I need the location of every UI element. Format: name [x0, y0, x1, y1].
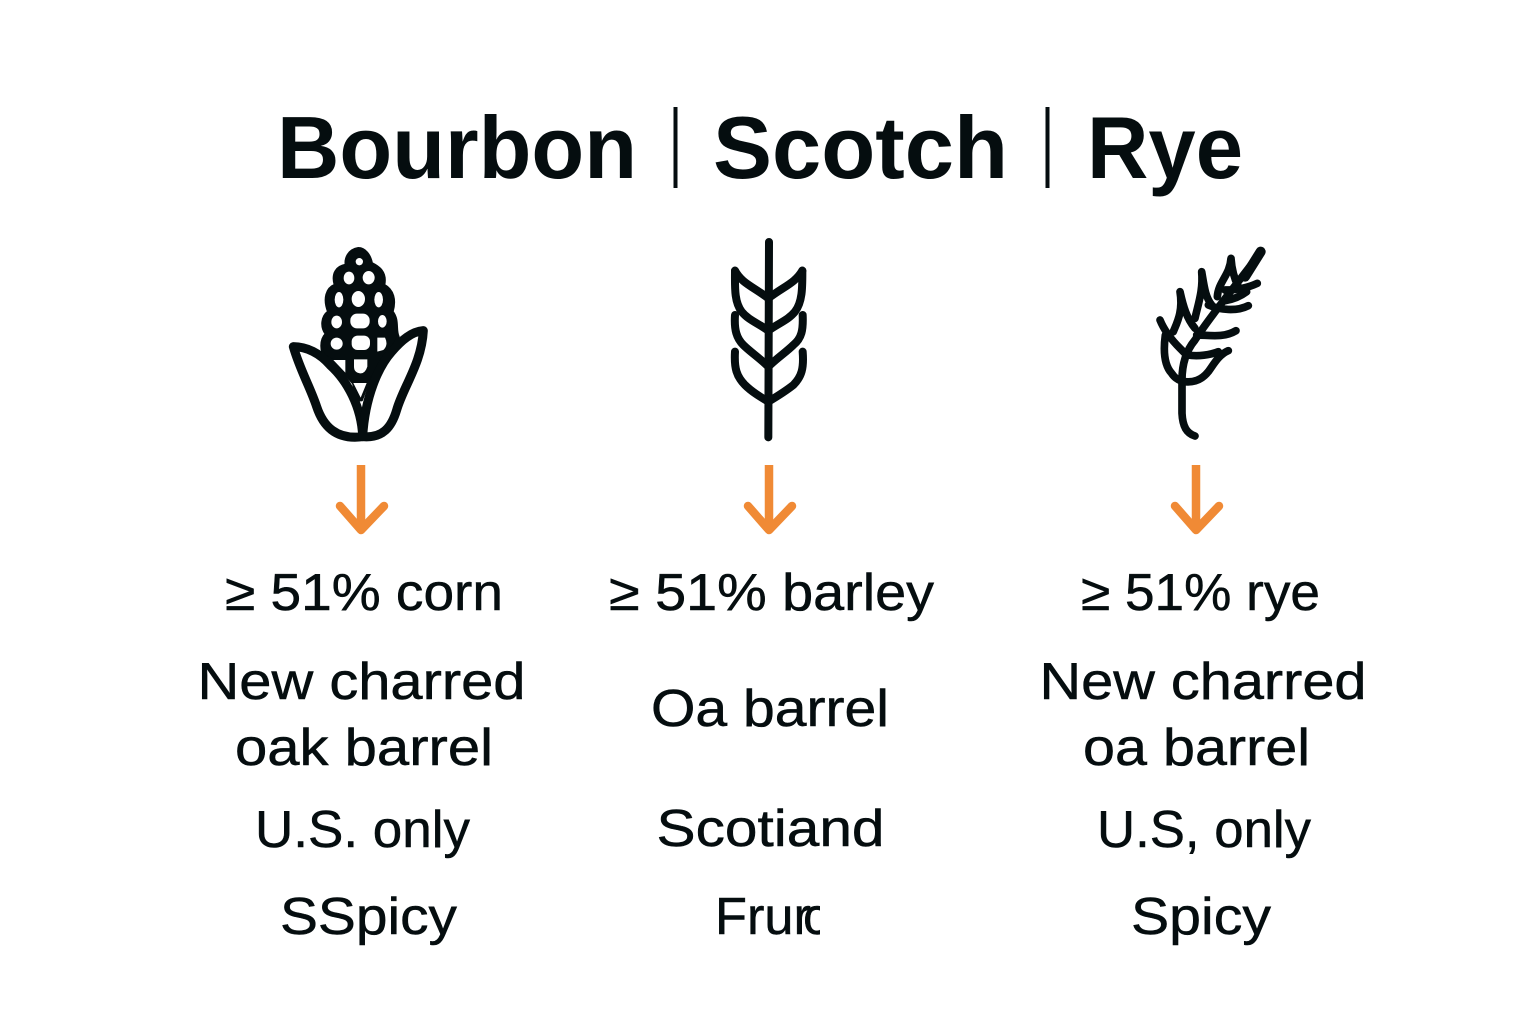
column: rye text: ≥ 51% rye: [1081, 564, 1320, 622]
column: bourbon text: oak barrel: [235, 719, 493, 777]
column: bourbon text: New charred: [198, 653, 526, 711]
column: scotch text: [609, 564, 934, 946]
arrow: rye: [1175, 465, 1219, 530]
arrow: barley: [748, 465, 792, 530]
column: rye text: New charred: [1040, 653, 1366, 711]
column: bourbon text: U.S. only: [255, 801, 470, 859]
column: rye text: Spicy: [1131, 888, 1271, 946]
column: rye text: U.S, only: [1097, 801, 1311, 859]
column: scotch text: Frur: [715, 888, 811, 946]
title: Scotch: [713, 98, 1008, 197]
icon: rye: [1160, 252, 1261, 436]
column: rye text: [1040, 564, 1366, 946]
column: scotch text: ≥ 51% barley: [609, 564, 934, 622]
column: scotch text: Scotiand: [656, 800, 884, 858]
column: bourbon text: ≥ 51% corn: [225, 564, 503, 622]
title: Bourbon: [277, 98, 637, 197]
icon: corn: [293, 248, 423, 437]
column: scotch text: c: [803, 888, 829, 946]
icon: barley: [735, 242, 803, 437]
column: bourbon text: SSpicy: [280, 888, 457, 946]
column: bourbon text: [198, 564, 526, 946]
column: rye text: oa barrel: [1083, 719, 1310, 777]
title: Rye: [1087, 98, 1243, 197]
column: scotch text: Oa barrel: [651, 680, 889, 738]
arrow: corn: [340, 465, 384, 530]
title: [277, 98, 1243, 197]
